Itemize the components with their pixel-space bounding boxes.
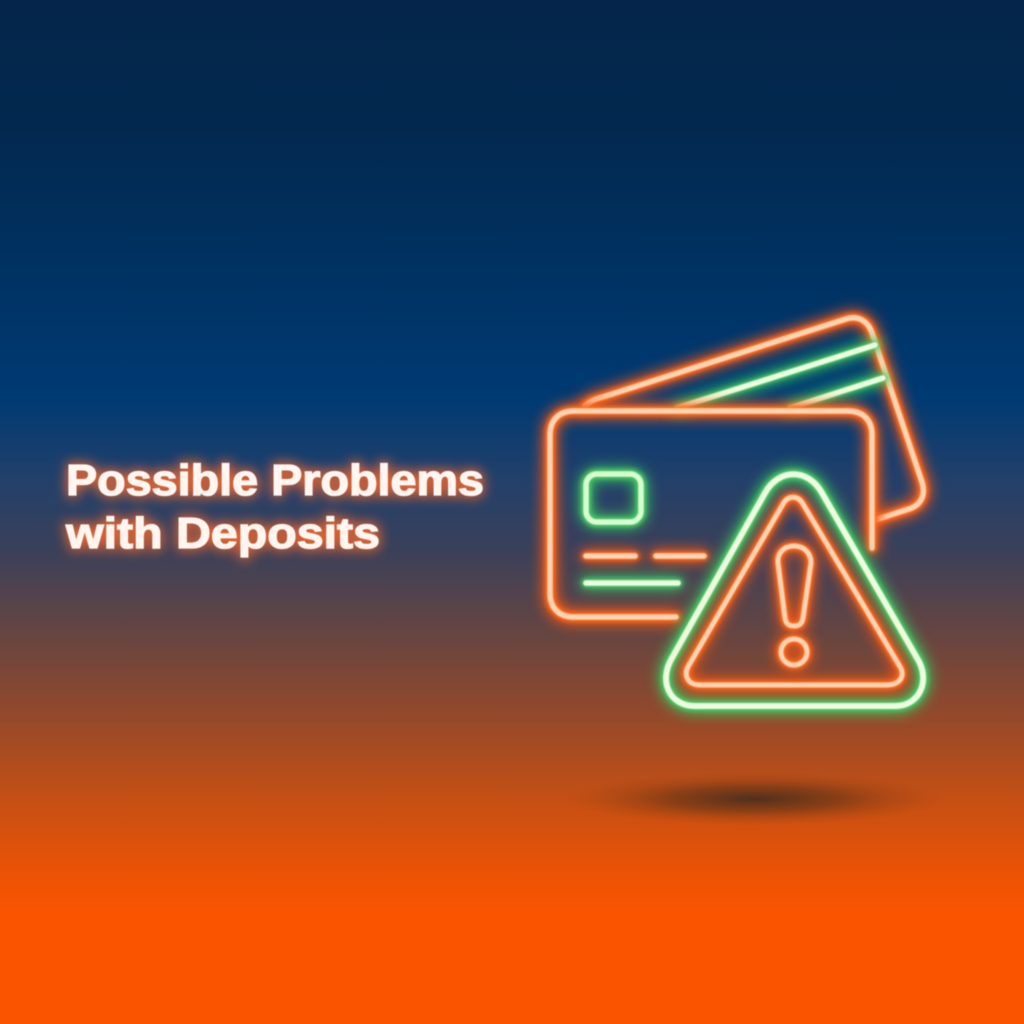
title: Possible Problems with Deposits: Possible Problems [66,456,484,505]
icon: back card green stripes [677,345,883,408]
title: Possible Problems with Deposits: Possible Problems [66,456,484,505]
title: Possible Problems with Deposits [65,456,484,558]
icon: front credit card outline [550,411,872,617]
icon: card number dashes [586,555,704,557]
icon: neon credit cards with warning triangle [550,318,923,706]
icon: warning triangle inner outline [686,497,902,685]
icon: card green text line [586,582,678,584]
icon: card chip [586,474,641,522]
floating shadow under icon [565,772,945,826]
title: Possible Problems with Deposits: with Deposits [65,509,380,558]
icon: exclamation mark [778,546,811,665]
title: Possible Problems with Deposits: with Deposits [65,509,380,558]
icon: warning triangle outer outline [666,474,923,706]
icon: back credit card outline [585,318,923,520]
